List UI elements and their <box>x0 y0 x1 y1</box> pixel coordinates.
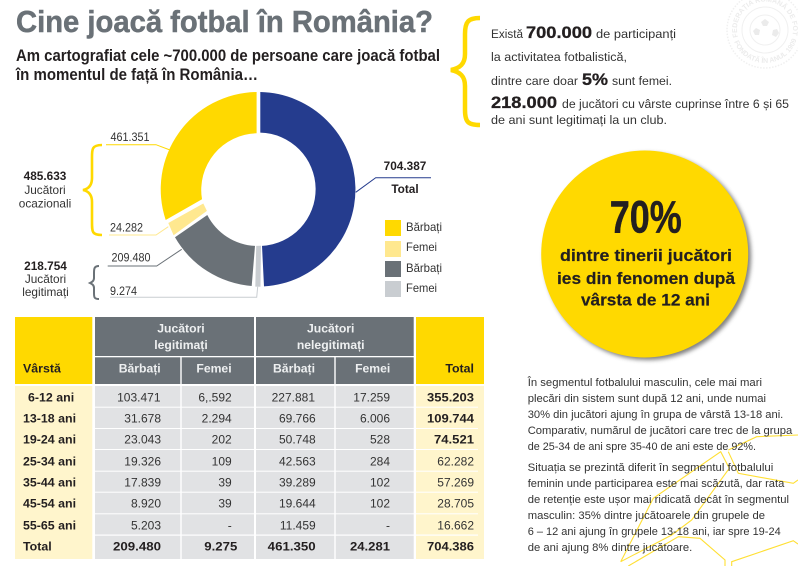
row: 6-12 ani: 227.881 <box>272 391 315 405</box>
paragraph: female segment: masculin: 35% dintre jucătoarele din grupele de <box>528 510 765 522</box>
row: 35-44 ani: 57.269 <box>437 476 474 490</box>
row: 45-54 ani: 28.705 <box>437 497 474 511</box>
legend: Bărbați <box>406 261 442 275</box>
row: 45-54 ani: 39 <box>218 497 232 511</box>
row: total <box>23 540 474 554</box>
key facts text: de jucători cu vârste cuprinse între 6 și 65 <box>562 97 789 111</box>
donut value labels: 24.282 <box>110 221 143 235</box>
paragraph: male segment: de 25-34 de ani spre 35-40 de ani este de 92%. <box>528 441 756 453</box>
donut value labels: 209.480 <box>112 251 151 265</box>
row: 13-18 ani: 6.006 <box>360 412 390 426</box>
label: registered players: legitimați <box>22 285 69 299</box>
subtitle <box>15 47 440 84</box>
table header <box>15 317 484 384</box>
row: 6-12 ani: 355.203 <box>427 391 474 405</box>
brace: occasional players <box>83 145 102 235</box>
key facts text: 218.000 <box>491 93 557 112</box>
table header: Vârstă <box>23 362 61 376</box>
paragraph: female segment: Situația se prezintă diferit în segmentul fotbalului <box>528 462 773 474</box>
row: 25-34 ani: 284 <box>370 455 390 469</box>
label: occasional players: 485.633 <box>24 169 67 183</box>
brace: key facts <box>451 18 480 125</box>
row: 55-65 ani: 55-65 ani <box>23 519 76 533</box>
segment: total <box>260 92 355 286</box>
row: 25-34 ani: 19.326 <box>124 455 161 469</box>
row: total: 9.275 <box>204 540 237 554</box>
row: 45-54 ani: 45-54 ani <box>23 497 76 511</box>
paragraph: female segment: de ani ajung 8% dintre jucătoare. <box>528 542 692 554</box>
segment: occasional women <box>168 204 207 235</box>
subtitle: Am cartografiat cele ~700.000 de persoane care joacă fotbal <box>16 47 440 65</box>
paragraph: female segment: feminin unde participarea este mai scăzută, dar rata <box>528 478 785 490</box>
key facts text: sunt femei. <box>612 74 672 88</box>
row: 35-44 ani <box>23 476 474 490</box>
callout circle: 70%: ies din fenomen după <box>557 269 736 288</box>
legend <box>385 220 442 297</box>
donut value labels: 9.274 <box>110 284 137 298</box>
row: 55-65 ani: 11.459 <box>280 519 316 533</box>
table body backgrounds <box>15 386 484 559</box>
row: 35-44 ani: 39.289 <box>279 476 316 490</box>
row: 25-34 ani: 42.563 <box>279 455 316 469</box>
row: 13-18 ani: 2.294 <box>202 412 232 426</box>
label: occasional players: Jucători <box>24 183 66 197</box>
key facts text <box>491 23 789 127</box>
total label <box>384 159 427 196</box>
row: 45-54 ani: 102 <box>370 497 390 511</box>
row: 45-54 ani: 19.644 <box>279 497 316 511</box>
table header: nelegitimați <box>297 338 365 352</box>
row: 19-24 ani: 202 <box>212 433 232 447</box>
row: 19-24 ani <box>23 433 474 447</box>
label: occasional players <box>19 169 71 210</box>
segment: registered men <box>175 215 255 286</box>
paragraph: male segment <box>527 376 793 453</box>
row: 45-54 ani <box>23 497 474 511</box>
row: total: 24.281 <box>350 540 390 554</box>
total label: 704.387 <box>384 159 427 173</box>
row: 55-65 ani: 16.662 <box>437 519 474 533</box>
row: 25-34 ani: 25-34 ani <box>23 455 76 469</box>
table header: Jucători <box>157 322 205 336</box>
key facts text: dintre care doar <box>491 74 578 88</box>
row: 6-12 ani: 17.259 <box>353 391 390 405</box>
table header: Bărbați <box>273 362 315 376</box>
row: 25-34 ani: 62.282 <box>437 455 474 469</box>
brace: registered players <box>90 266 99 299</box>
key facts text: de participanți <box>596 27 676 41</box>
row: 35-44 ani: 39 <box>218 476 232 490</box>
watermark: football outline <box>621 435 798 566</box>
paragraph: female segment: de retenție este ușor mai ridicată decât în segmentul <box>528 494 789 506</box>
paragraph: female segment <box>528 462 789 554</box>
row: 55-65 ani: - <box>228 519 232 533</box>
donut value labels <box>110 130 151 298</box>
table header: Bărbați <box>119 362 161 376</box>
row: 45-54 ani: 8.920 <box>131 497 161 511</box>
row: 55-65 ani <box>23 519 474 533</box>
row: 25-34 ani: 109 <box>212 455 232 469</box>
paragraph: male segment: În segmentul fotbalului masculin, cele mai mari <box>527 376 762 389</box>
legend: Femei <box>406 281 437 295</box>
row: 25-34 ani <box>23 455 474 469</box>
watermark: federation logo: FONDATĂ ÎN ANUL 1909 <box>734 38 796 63</box>
row: 6-12 ani: 6,.592 <box>198 391 232 405</box>
table header: Femei <box>355 362 390 376</box>
row: total: 704.386 <box>427 540 474 554</box>
row: 19-24 ani: 50.748 <box>279 433 316 447</box>
subtitle: în momentul de față în România… <box>15 66 258 84</box>
key facts text: 5% <box>582 70 608 89</box>
row: 19-24 ani: 528 <box>370 433 390 447</box>
table header: Jucători <box>307 322 354 336</box>
row: 35-44 ani: 35-44 ani <box>23 476 76 490</box>
data table <box>15 317 484 559</box>
row: 13-18 ani <box>23 412 474 426</box>
legend: Femei <box>406 240 437 254</box>
total label: Total <box>391 182 419 196</box>
row: 13-18 ani: 13-18 ani <box>23 412 76 426</box>
label: occasional players: ocazionali <box>19 196 71 210</box>
segment: registered women <box>255 246 261 287</box>
row: 19-24 ani: 74.521 <box>434 433 474 447</box>
table header: legitimați <box>154 338 208 352</box>
row: 13-18 ani: 69.766 <box>279 412 316 426</box>
callout circle: 70% <box>541 150 751 360</box>
row: 6-12 ani <box>28 391 474 405</box>
label: registered players: Jucători <box>25 272 66 286</box>
donut value labels: 461.351 <box>110 130 150 144</box>
leader lines <box>106 145 431 297</box>
row: total: 461.350 <box>268 540 316 554</box>
paragraph: male segment: 30% din jucători ajung în grupa de vârstă 13-18 ani. <box>528 409 783 421</box>
row: 55-65 ani: 5.203 <box>131 519 161 533</box>
table header: Total <box>445 362 474 376</box>
paragraph: male segment: plecări din sistem sunt după 12 ani, unde numai <box>528 393 766 405</box>
segment: occasional men <box>161 92 257 220</box>
legend: Bărbați <box>406 220 442 234</box>
row: 13-18 ani: 109.744 <box>427 412 474 426</box>
paragraph: female segment: 6 – 12 ani ajung în grupele 13-18 ani, iar spre 19-24 <box>528 526 781 538</box>
title: Cine joacă fotbal în România? <box>16 4 433 39</box>
row: 35-44 ani: 102 <box>370 476 390 490</box>
callout circle: 70%: vârsta de 12 ani <box>581 291 710 310</box>
row: total: 209.480 <box>113 540 161 554</box>
row: 13-18 ani: 31.678 <box>124 412 161 426</box>
row: 19-24 ani: 19-24 ani <box>23 433 76 447</box>
key facts text: Există <box>491 27 523 41</box>
donut chart <box>161 92 355 287</box>
callout circle: 70%: dintre tinerii jucători <box>560 246 732 265</box>
callout circle: 70%: 70% <box>610 192 682 243</box>
paragraph: male segment: Comparativ, numărul de jucători care trec de la grupa <box>528 425 793 437</box>
label: registered players: 218.754 <box>24 259 67 273</box>
table header: Femei <box>196 362 232 376</box>
row: 35-44 ani: 17.839 <box>124 476 161 490</box>
key facts text: 700.000 <box>526 23 592 42</box>
key facts text: de ani sunt legitimați la un club. <box>491 113 667 127</box>
label: registered players <box>22 259 69 299</box>
row: total: Total <box>23 540 52 554</box>
row: 19-24 ani: 23.043 <box>124 433 161 447</box>
key facts text: la activitatea fotbalistică, <box>491 50 627 64</box>
row: 55-65 ani: - <box>386 519 390 533</box>
row: 6-12 ani: 6-12 ani <box>28 391 74 405</box>
watermark: federation logo <box>726 0 798 68</box>
row: 6-12 ani: 103.471 <box>117 391 161 405</box>
